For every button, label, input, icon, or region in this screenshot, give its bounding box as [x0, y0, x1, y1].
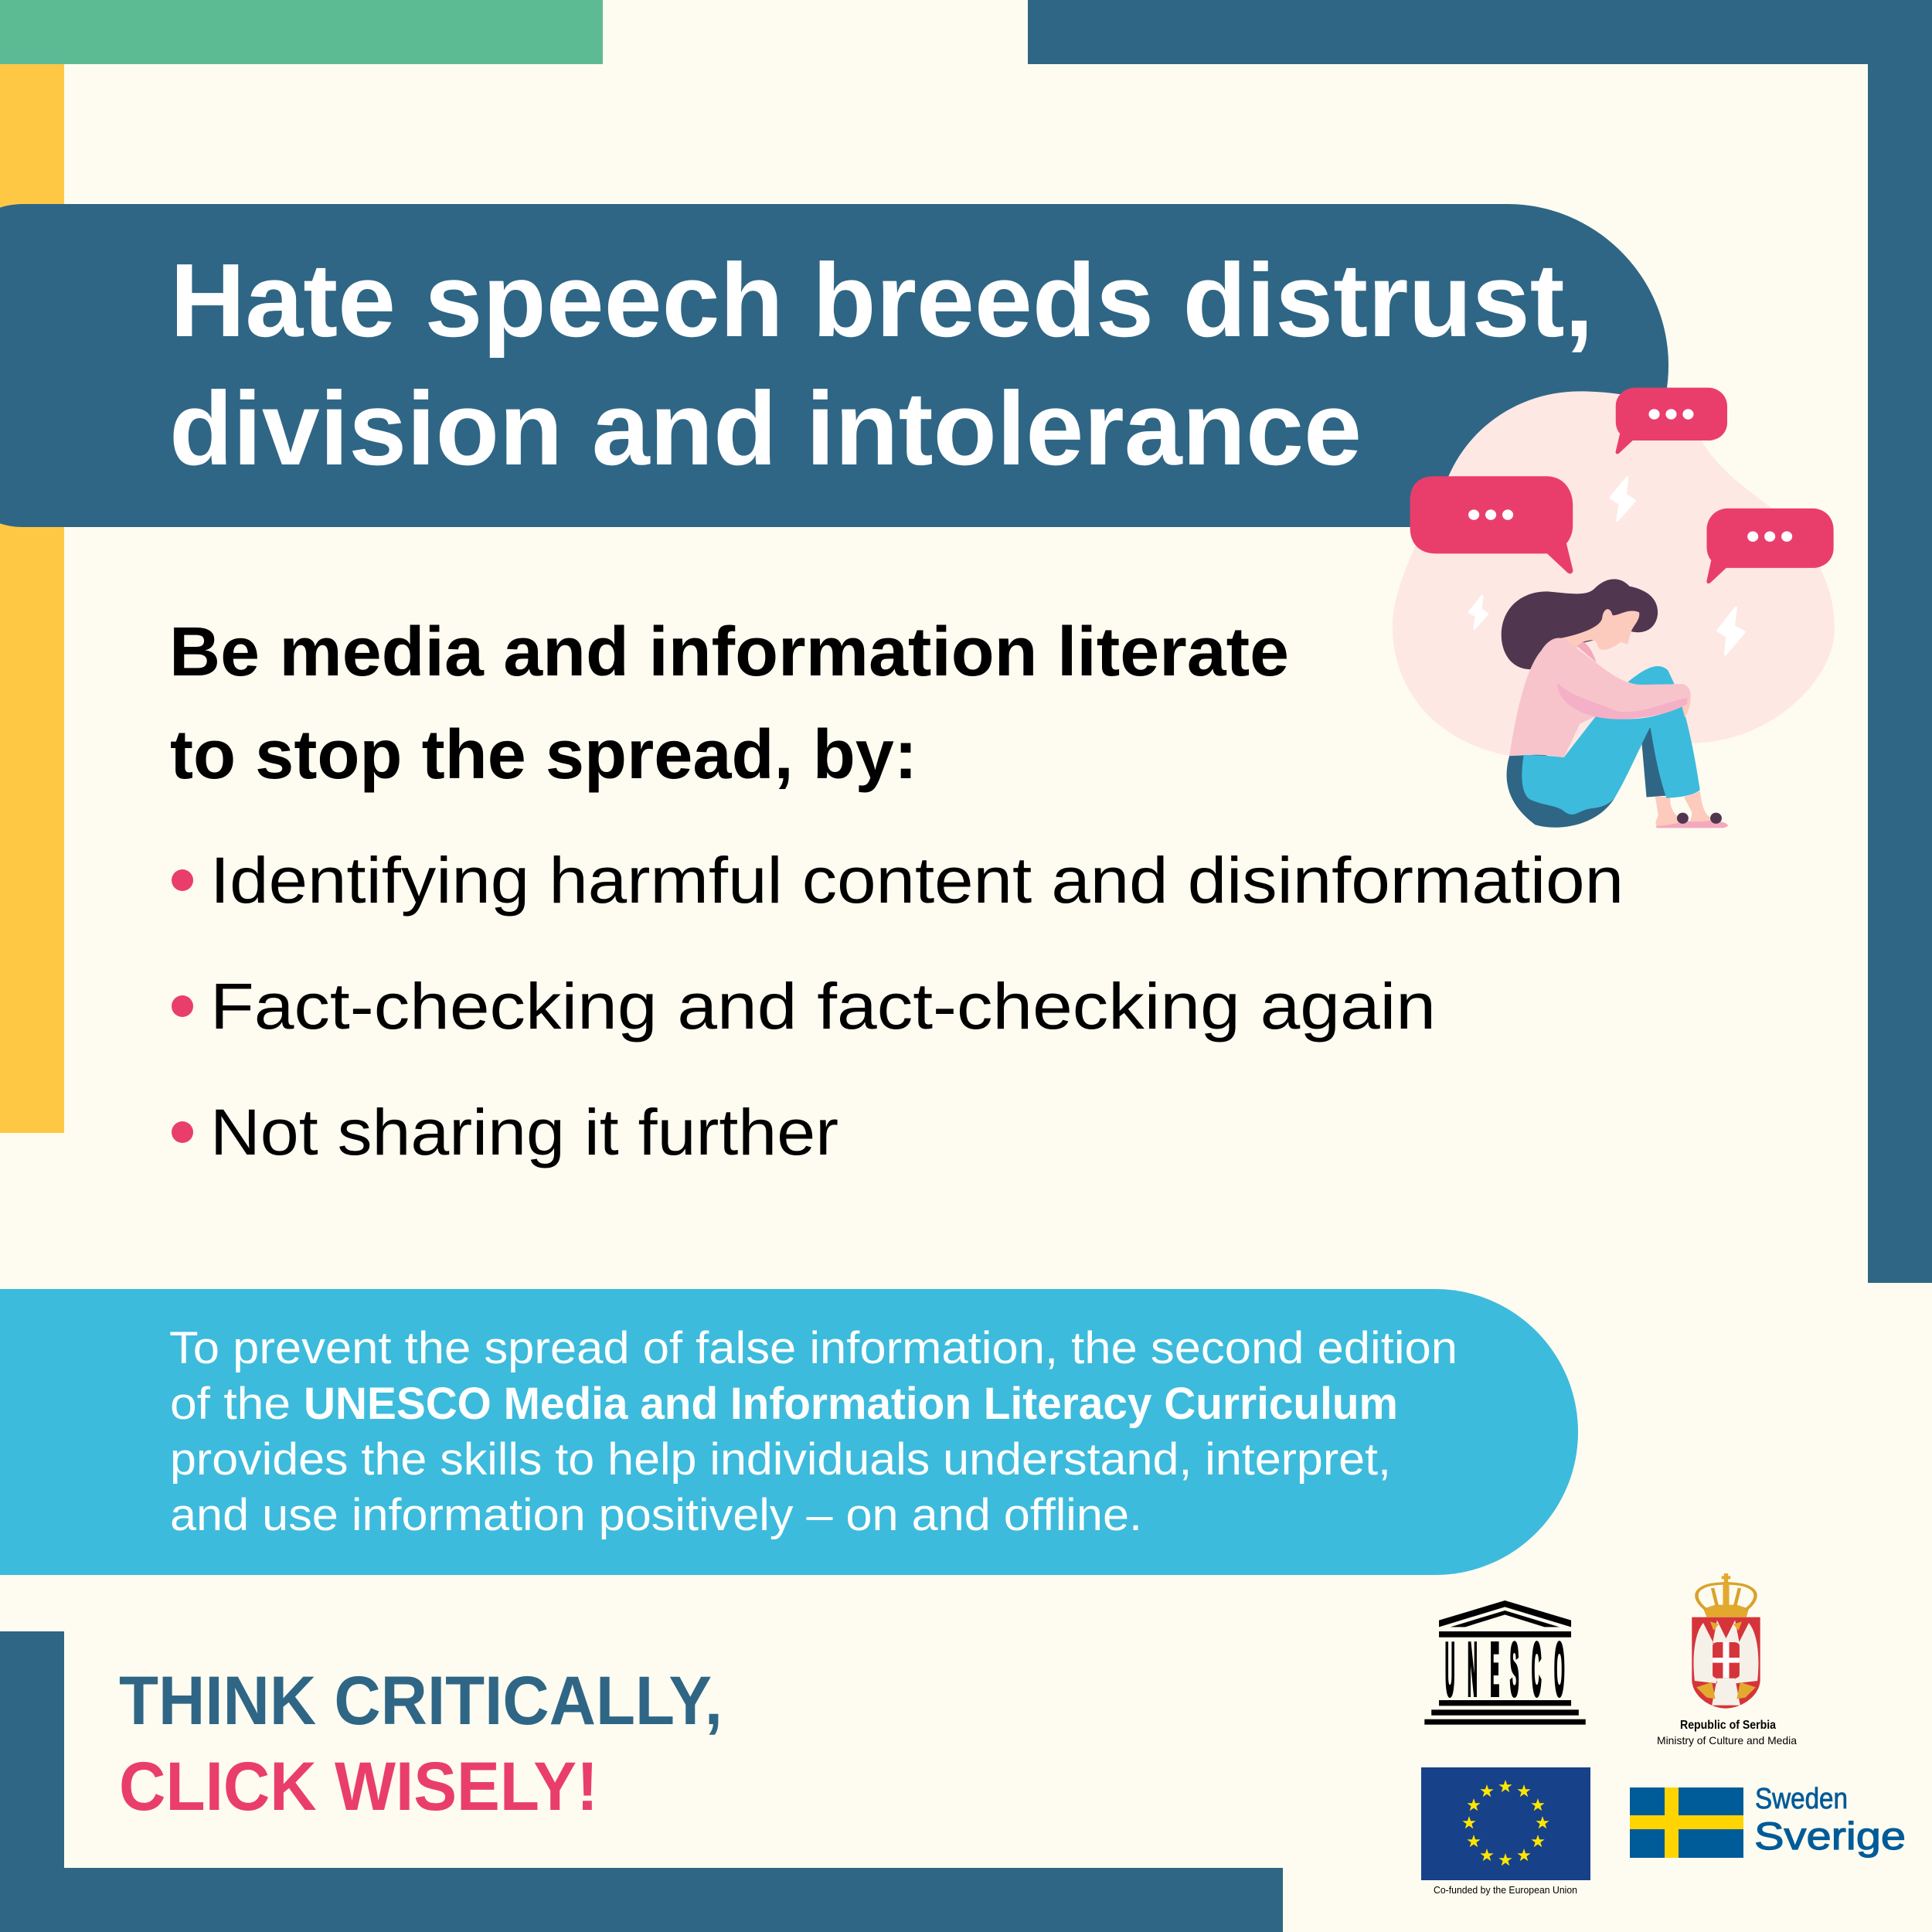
info panel text: provides the skills to help individuals understand, interpret, — [170, 1434, 1391, 1485]
frame: top right blue corner — [1028, 0, 1932, 1283]
info panel text: and use information positively – on and offline. — [170, 1490, 1142, 1540]
logo: Republic of Serbia: Ministry of Culture and Media — [1657, 1734, 1797, 1747]
title: division and intolerance — [169, 370, 1362, 487]
info panel text — [169, 1323, 1458, 1540]
illustration: large speech bubble — [1410, 476, 1573, 573]
illustration: slippers — [1656, 813, 1728, 828]
info panel text: UNESCO Media and Information Literacy Curriculum — [304, 1379, 1398, 1429]
call to action — [119, 1662, 723, 1825]
logo: European Union flag — [1421, 1767, 1590, 1896]
subheading: Be media and information literate — [169, 614, 1289, 691]
subheading — [169, 614, 1289, 794]
title — [169, 242, 1594, 487]
logo: Republic of Serbia: Republic of Serbia — [1680, 1719, 1776, 1732]
logo: Sweden: Sweden — [1755, 1783, 1848, 1815]
illustration: right speech bubble — [1706, 509, 1834, 583]
info panel text: of the — [170, 1379, 291, 1429]
logo: UNESCO — [1424, 1600, 1586, 1725]
bullet 1: Identifying harmful content and disinformation — [210, 844, 1624, 917]
illustration: sleeve shadow — [1557, 682, 1687, 719]
bullet 2: Fact-checking and fact-checking again — [210, 970, 1436, 1043]
bullet 3: Not sharing it further — [210, 1096, 838, 1168]
coat of arms — [1692, 1573, 1760, 1709]
cyan info panel — [0, 1289, 1578, 1575]
illustration: front trousers — [1522, 666, 1700, 815]
info panel text: To prevent the spread of false information, the second edition — [169, 1323, 1458, 1373]
illustration: back trousers — [1507, 754, 1615, 828]
illustration: far leg — [1641, 727, 1668, 797]
illustration: pink blob — [1393, 391, 1835, 757]
bullet list — [172, 844, 1624, 1168]
subheading: to stop the spread, by: — [170, 716, 917, 794]
illustration: top speech bubble — [1616, 388, 1727, 454]
logo: UNESCO: UNESCO — [1445, 1628, 1565, 1711]
title banner — [0, 204, 1668, 527]
call to action: CLICK WISELY! — [119, 1747, 598, 1825]
illustration: lower legs — [1655, 791, 1721, 826]
logo: Sweden — [1630, 1783, 1906, 1858]
illustration: face and neck — [1560, 609, 1639, 651]
frame: bottom left blue corner — [0, 1631, 1283, 1932]
logo: Republic of Serbia — [1657, 1573, 1797, 1747]
title: Hate speech breeds distrust, — [170, 242, 1594, 359]
illustration: inner collar — [1577, 642, 1597, 663]
frame: left yellow bar — [0, 64, 64, 1133]
illustration: hair — [1502, 579, 1658, 669]
illustration: lightning bolts — [1469, 478, 1744, 655]
call to action: THINK CRITICALLY, — [119, 1662, 723, 1739]
frame: top green bar — [0, 0, 603, 64]
logo: European Union flag: Co-funded by the European Union — [1434, 1884, 1577, 1896]
illustration: hand — [1681, 684, 1691, 718]
logo: Sweden: Sverige — [1754, 1815, 1906, 1858]
illustration: sweater — [1509, 638, 1691, 757]
illustration: distressed woman with speech bubbles — [1393, 388, 1835, 828]
